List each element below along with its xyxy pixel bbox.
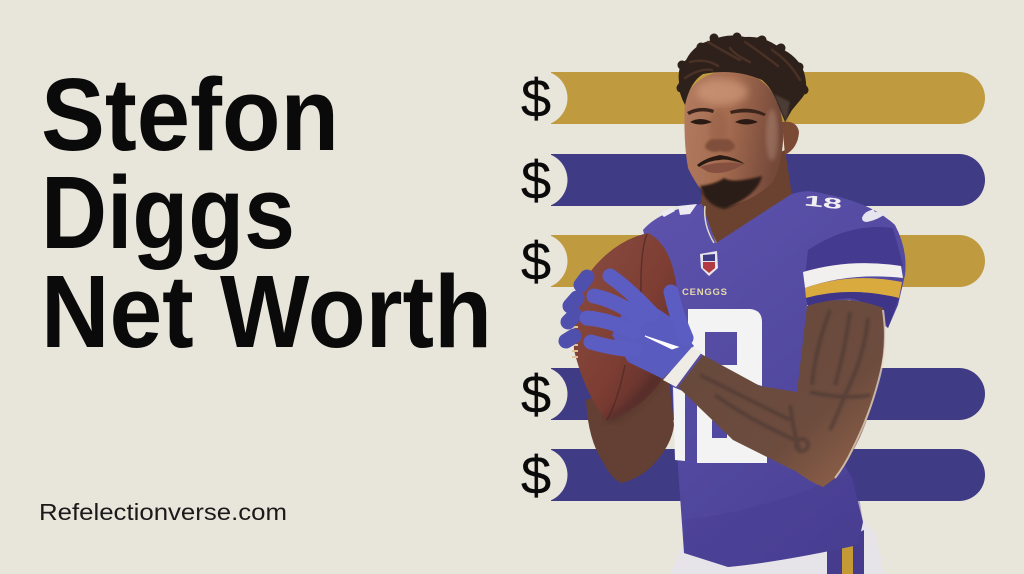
head xyxy=(679,36,806,209)
title: Diggs xyxy=(41,155,295,270)
fingers xyxy=(587,276,686,350)
bar 4: navy xyxy=(512,365,985,425)
bar 4: navy: $ xyxy=(521,365,551,425)
glove xyxy=(566,276,702,387)
swoosh xyxy=(645,336,678,349)
face xyxy=(684,70,783,208)
sleeve shade xyxy=(804,227,903,285)
nose xyxy=(705,139,735,152)
mouth xyxy=(700,163,744,173)
beard xyxy=(700,176,762,209)
nike swoosh xyxy=(862,209,890,222)
hem shade xyxy=(684,470,863,567)
shoulder number: 18 xyxy=(803,192,843,213)
pants xyxy=(671,515,884,574)
hair xyxy=(679,36,806,122)
jersey xyxy=(643,191,906,567)
collar trim xyxy=(705,206,714,243)
moustache xyxy=(697,155,745,167)
palm xyxy=(612,292,694,379)
twists xyxy=(681,37,804,90)
website credit: Refelectionverse.com xyxy=(39,499,287,525)
sleeve white stripe xyxy=(803,263,903,288)
jersey name: CENGGS xyxy=(682,287,727,298)
sleeve cuff xyxy=(806,292,899,328)
ear xyxy=(782,122,799,155)
face shading xyxy=(696,79,778,161)
eyes and brows xyxy=(687,108,766,124)
jersey number xyxy=(688,309,762,386)
bar 3: gold xyxy=(512,232,985,292)
arm highlight xyxy=(835,310,885,478)
nfl shield xyxy=(700,251,718,276)
title: Stefon xyxy=(41,57,339,172)
title: Net Worth xyxy=(41,254,492,369)
back finger tips xyxy=(566,277,587,341)
bar 5: navy: $ xyxy=(521,446,551,506)
front arm with tattoos xyxy=(678,300,885,487)
left shoulder number xyxy=(660,204,697,217)
back arm xyxy=(586,370,674,483)
bar 1: gold xyxy=(512,69,985,129)
bar 3: gold: $ xyxy=(521,232,551,292)
bar 2: navy xyxy=(512,151,985,211)
tattoo shading xyxy=(700,310,870,451)
neck xyxy=(700,150,792,243)
football xyxy=(574,233,677,420)
bar 5: navy xyxy=(512,446,985,506)
bar 2: navy: $ xyxy=(521,151,551,211)
bar list with dollar icons xyxy=(512,69,985,506)
sleeve gold stripe xyxy=(805,278,902,298)
title xyxy=(41,57,492,369)
football player illustration xyxy=(566,36,906,574)
fade xyxy=(774,94,790,122)
bar 1: gold: $ xyxy=(521,69,551,129)
wrist band xyxy=(663,347,702,387)
